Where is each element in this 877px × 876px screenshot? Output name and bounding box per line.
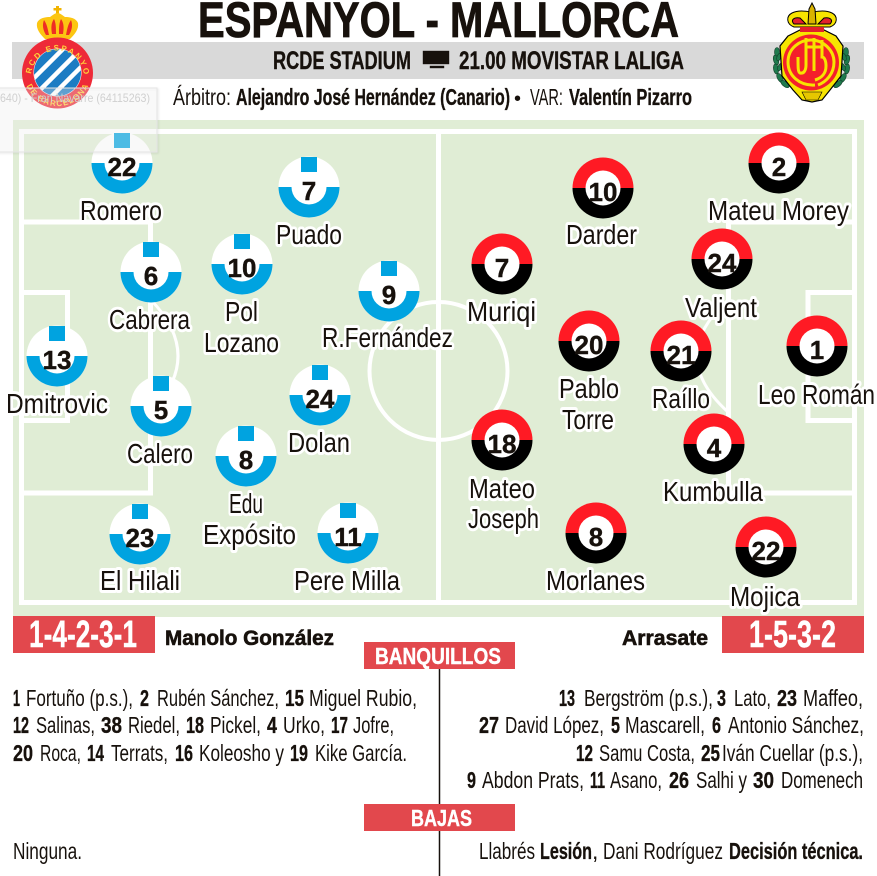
shield bbox=[780, 30, 843, 102]
text block: Mallorca bench: 9 bbox=[467, 767, 476, 793]
name: Edu Expósito bbox=[203, 488, 296, 550]
center divider bbox=[438, 669, 440, 876]
name: Edu Expósito: Expósito bbox=[203, 519, 296, 550]
player: Dmitrovic 13: 13 bbox=[43, 345, 71, 375]
match info line bbox=[273, 47, 684, 75]
text block: Espanyol bench: 15 bbox=[285, 685, 304, 711]
text block: Espanyol bench: Kike García. bbox=[315, 740, 407, 766]
name: Puado: Puado bbox=[276, 219, 342, 250]
text block: Espanyol bench: 2 bbox=[140, 685, 149, 711]
text block: Espanyol bench: Fortuño (p.s.), bbox=[26, 685, 133, 711]
heading: banquillos: BANQUILLOS bbox=[375, 643, 501, 669]
heading: bajas: BAJAS bbox=[411, 805, 472, 831]
player: Kumbulla 4: 4 bbox=[707, 433, 722, 463]
text block: Espanyol bench: Jofre, bbox=[353, 712, 394, 738]
name: Pol Lozano: Pol bbox=[225, 296, 258, 327]
text block: Espanyol bench: Roca, bbox=[40, 740, 81, 766]
text block: Mallorca bench: 26 bbox=[669, 767, 689, 793]
player: Pol Lozano 10: 10 bbox=[228, 253, 256, 283]
player: Mateu Morey 2 bbox=[748, 133, 810, 193]
text block: Mallorca bench: 11 bbox=[590, 767, 605, 793]
name: Mateo Joseph: Mateo bbox=[469, 473, 535, 504]
text block: Espanyol bench: 19 bbox=[290, 740, 308, 766]
player: Dolan 24 bbox=[290, 364, 350, 426]
text block: Mallorca bench: Bergström (p.s.), bbox=[584, 685, 713, 711]
text block: Mallorca absences: Lesión bbox=[540, 838, 592, 864]
player: Raíllo 21 bbox=[650, 321, 712, 381]
player: R.Fernández 9: 9 bbox=[382, 280, 396, 310]
player: Dmitrovic 13 bbox=[26, 326, 88, 386]
text block: Mallorca bench: 6 bbox=[712, 712, 721, 738]
player: Pablo Torre 20 bbox=[558, 311, 620, 371]
text block: Espanyol bench: 1 bbox=[13, 685, 20, 711]
name: Edu Expósito: Edu bbox=[229, 488, 263, 519]
player: Mojica 22 bbox=[736, 517, 796, 577]
player: Calero 5: 5 bbox=[154, 395, 168, 425]
player: Leo Román 1: 1 bbox=[810, 335, 824, 365]
name: Morlanes: Morlanes bbox=[546, 565, 645, 596]
crown bbox=[788, 3, 836, 32]
text block: Mallorca bench: 5 bbox=[611, 712, 620, 738]
match info line: 21.00 MOVISTAR LALIGA bbox=[459, 47, 684, 75]
text block: Espanyol bench: Urko, bbox=[283, 712, 325, 738]
text block: Espanyol bench: 12 bbox=[13, 712, 29, 738]
text block: Mallorca bench: Mascarell, bbox=[625, 712, 705, 738]
player: Kumbulla 4 bbox=[684, 414, 744, 474]
referee line: Árbitro: bbox=[173, 84, 231, 110]
text block: Mallorca bench: Salhi y bbox=[696, 767, 747, 793]
text block: Mallorca absences bbox=[479, 838, 863, 864]
text block: Mallorca bench: 13 bbox=[559, 685, 575, 711]
header grey bar bbox=[12, 42, 864, 79]
text block: Mallorca bench: 23 bbox=[777, 685, 797, 711]
player: Darder 10: 10 bbox=[589, 177, 617, 207]
text block: Espanyol bench: 14 bbox=[87, 740, 104, 766]
icon: Espanyol crest bbox=[22, 6, 93, 108]
crown bbox=[37, 6, 78, 39]
coach: Arrasate: Arrasate bbox=[622, 627, 708, 650]
player: El Hilali 23 bbox=[110, 504, 170, 564]
text block: Espanyol bench: 4 bbox=[267, 712, 277, 738]
tooltip overlay: 640) - Fran Navarre (64115263) bbox=[0, 91, 150, 105]
name: Pablo Torre bbox=[559, 373, 619, 435]
match info line: RCDE STADIUM bbox=[273, 47, 411, 75]
name: Pablo Torre: Pablo bbox=[559, 373, 619, 404]
name: Pere Milla: Pere Milla bbox=[294, 565, 400, 596]
text block: Mallorca absences: , bbox=[592, 838, 598, 864]
text block: Mallorca bench: Asano, bbox=[610, 767, 662, 793]
player: Valjent 24: 24 bbox=[708, 248, 737, 278]
player: Puado 7 bbox=[278, 156, 340, 218]
text block: Espanyol absences: Ninguna. bbox=[13, 838, 82, 864]
text block: Espanyol bench bbox=[13, 685, 417, 766]
name: Calero: Calero bbox=[127, 438, 193, 469]
name: Darder: Darder bbox=[566, 219, 637, 250]
icon: Mallorca crest bbox=[772, 3, 851, 102]
text block: Mallorca bench: 25 bbox=[701, 740, 720, 766]
player: Mateo Joseph 18 bbox=[472, 410, 532, 470]
panel: football pitch bbox=[13, 120, 864, 617]
text block: Mallorca bench: Abdon Prats, bbox=[482, 767, 584, 793]
text block: Espanyol bench: Rubén Sánchez, bbox=[157, 685, 279, 711]
player: Pol Lozano 10 bbox=[212, 234, 272, 294]
heading: bajas bbox=[364, 804, 515, 831]
text block: Mallorca bench: Lato, bbox=[734, 685, 771, 711]
name: R.Fernández: R.Fernández bbox=[322, 322, 453, 353]
player: Leo Román 1 bbox=[786, 316, 848, 376]
name: Mateu Morey: Mateu Morey bbox=[708, 195, 849, 226]
text block: Espanyol bench: Miguel Rubio, bbox=[309, 685, 417, 711]
player: Puado 7: 7 bbox=[302, 176, 316, 206]
name: Muriqi: Muriqi bbox=[467, 296, 536, 327]
referee line: Alejandro José Hernández (Canario) bbox=[236, 84, 510, 110]
text block: Espanyol bench: Terrats, bbox=[111, 740, 168, 766]
formation: Mallorca: 1-5-3-2 bbox=[749, 614, 836, 656]
name: Raíllo: Raíllo bbox=[652, 383, 710, 414]
player: Pere Milla 11 bbox=[318, 502, 378, 564]
name: Dmitrovic: Dmitrovic bbox=[6, 388, 108, 419]
text block: Mallorca bench: 30 bbox=[753, 767, 774, 793]
player: Muriqi 7 bbox=[472, 234, 532, 294]
name: Cabrera: Cabrera bbox=[109, 304, 190, 335]
player: Raíllo 21: 21 bbox=[667, 340, 695, 370]
coach: Manolo González: Manolo González bbox=[165, 627, 334, 650]
referee line: • bbox=[514, 88, 521, 110]
name: Romero: Romero bbox=[80, 195, 162, 226]
text block: Espanyol bench: 20 bbox=[13, 740, 33, 766]
text block: Espanyol bench: 38 bbox=[101, 712, 122, 738]
text block: Mallorca bench: 12 bbox=[576, 740, 593, 766]
text block: Espanyol bench: Riedel, bbox=[128, 712, 180, 738]
player: Cabrera 6: 6 bbox=[144, 261, 158, 291]
player: Pablo Torre 20: 20 bbox=[575, 330, 603, 360]
player: Mateu Morey 2: 2 bbox=[772, 152, 786, 182]
tooltip overlay bbox=[0, 88, 157, 152]
text block: Espanyol bench: Salinas, bbox=[36, 712, 95, 738]
player: Darder 10 bbox=[572, 158, 634, 218]
referee line: Valentín Pizarro bbox=[569, 84, 692, 110]
name: Dolan: Dolan bbox=[288, 427, 350, 458]
icon: television bbox=[423, 51, 449, 68]
player: Muriqi 7: 7 bbox=[495, 253, 509, 283]
referee line: VAR: bbox=[530, 84, 563, 110]
player: Calero 5 bbox=[130, 376, 192, 436]
text block: Espanyol bench: 16 bbox=[175, 740, 193, 766]
laurels bbox=[772, 48, 851, 89]
name: Pol Lozano bbox=[204, 296, 279, 358]
player: Morlanes 8 bbox=[566, 503, 626, 563]
name: Pablo Torre: Torre bbox=[562, 404, 614, 435]
text block: Mallorca bench bbox=[467, 685, 864, 793]
player: El Hilali 23: 23 bbox=[126, 523, 154, 553]
player: Cabrera 6 bbox=[120, 242, 182, 302]
name: Mateo Joseph: Joseph bbox=[468, 503, 539, 534]
name: El Hilali: El Hilali bbox=[100, 565, 180, 596]
player: Mojica 22: 22 bbox=[752, 536, 780, 566]
player: Mateo Joseph 18: 18 bbox=[488, 429, 516, 459]
text block: Mallorca absences: Llabrés bbox=[479, 838, 535, 864]
text block: Mallorca bench: 27 bbox=[479, 712, 499, 738]
formation: Espanyol: 1-4-2-3-1 bbox=[29, 614, 137, 656]
name: Mateo Joseph bbox=[468, 473, 539, 534]
player: R.Fernández 9 bbox=[358, 260, 420, 322]
player: Romero 22: 22 bbox=[108, 152, 136, 182]
text block: Espanyol bench: 18 bbox=[186, 712, 204, 738]
player: Edu Expósito 8: 8 bbox=[239, 445, 253, 475]
text block: Mallorca bench: 3 bbox=[717, 685, 726, 711]
text block: Mallorca bench: Samu Costa, bbox=[599, 740, 695, 766]
text block: Espanyol bench: Koleosho y bbox=[199, 740, 284, 766]
name: Valjent: Valjent bbox=[685, 292, 757, 323]
text block: Mallorca absences: Dani Rodríguez bbox=[603, 838, 723, 864]
player: Morlanes 8: 8 bbox=[589, 522, 603, 552]
icon: Espanyol crest: DE BARCELONA bbox=[26, 84, 88, 106]
name: Kumbulla: Kumbulla bbox=[663, 476, 763, 507]
bottom ornament bbox=[802, 92, 822, 100]
player: Dolan 24: 24 bbox=[306, 384, 335, 414]
text block: Espanyol bench: 17 bbox=[331, 712, 348, 738]
player: Edu Expósito 8 bbox=[216, 426, 276, 486]
player: Valjent 24 bbox=[692, 229, 752, 289]
name: Pol Lozano: Lozano bbox=[204, 327, 279, 358]
name: Mojica: Mojica bbox=[730, 581, 800, 612]
text block: Mallorca bench: David López, bbox=[505, 712, 604, 738]
player: Romero 22 bbox=[92, 132, 152, 194]
text block: Espanyol bench: Pickel, bbox=[210, 712, 261, 738]
player: Pere Milla 11: 11 bbox=[334, 522, 362, 552]
